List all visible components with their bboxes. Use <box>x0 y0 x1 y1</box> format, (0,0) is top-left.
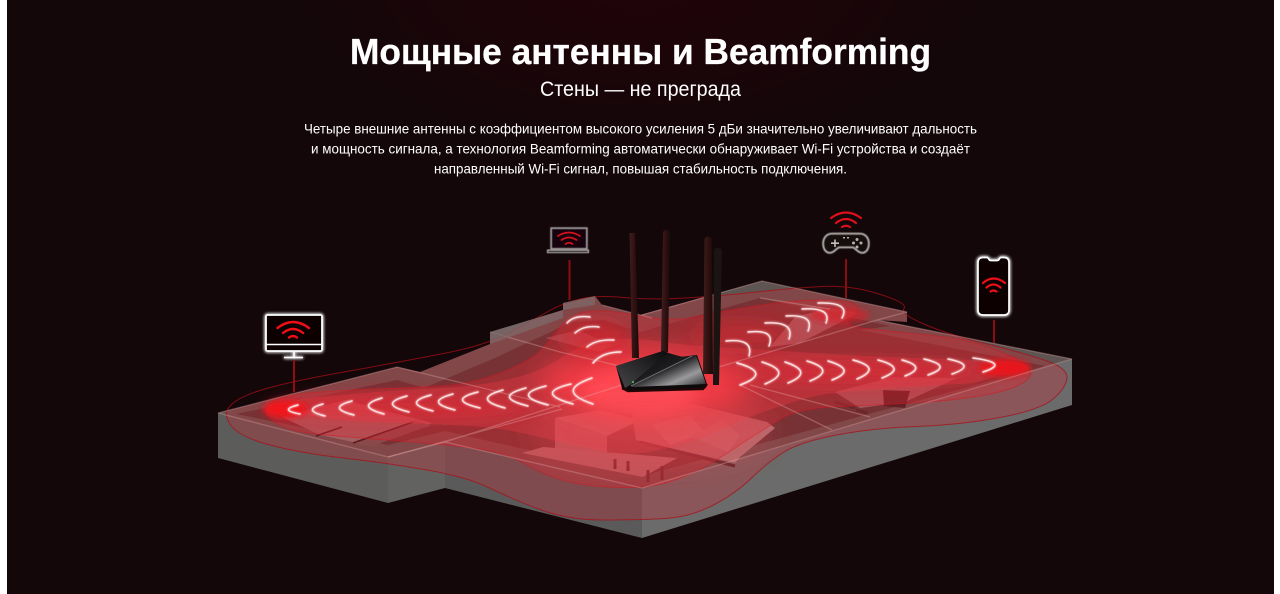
signal waves: right beam <box>737 358 995 385</box>
icon: game controller <box>823 212 869 253</box>
antenna 4 <box>713 248 722 385</box>
antenna 1 <box>630 233 639 358</box>
furniture: bed <box>282 400 432 446</box>
furniture: sofa <box>632 398 775 466</box>
icon: monitor <box>266 315 322 358</box>
signal waves: back-right beam <box>726 303 844 356</box>
connector: controller <box>845 259 847 298</box>
connector: laptop <box>568 260 570 300</box>
furniture: cabinet and table <box>522 410 677 482</box>
icon: smartphone <box>978 258 1009 315</box>
icon: router with four antennas <box>616 230 722 391</box>
description text: и мощность сигнала, а технология Beamforming автоматически обнаруживает Wi-Fi устройства и создаёт <box>311 140 971 156</box>
connector: smartphone <box>993 320 995 343</box>
room interiors <box>218 281 1072 488</box>
signal waves: left beam <box>288 378 593 416</box>
icon: controller wifi <box>831 212 861 227</box>
description text: направленный Wi-Fi сигнал, повышая стабильность подключения. <box>434 160 847 176</box>
signal glow: router core <box>263 307 1031 464</box>
subtitle: Стены — не преграда <box>540 78 741 101</box>
furniture: back-right room and dining area <box>770 308 957 413</box>
signal field: outer contour <box>226 286 1067 520</box>
icon: smartphone wifi <box>983 278 1005 292</box>
signal waves: back-left beam <box>567 317 621 363</box>
connector: monitor <box>293 360 295 392</box>
signal field: middle contour <box>266 300 1030 488</box>
description text <box>304 120 977 176</box>
back edge highlights <box>490 296 595 344</box>
antenna 2 <box>661 230 670 352</box>
title: Мощные антенны и Beamforming <box>350 31 931 72</box>
icon: monitor wifi <box>278 322 309 338</box>
icon: laptop <box>548 228 588 253</box>
icon: laptop wifi <box>558 232 580 244</box>
signal field: inner contour <box>281 339 1005 454</box>
antenna 3 <box>703 236 713 374</box>
furniture: back-left room <box>546 330 612 352</box>
floor plan illustration <box>218 281 1072 538</box>
outer walls <box>218 359 1072 538</box>
description text: Четыре внешние антенны с коэффициентом высокого усиления 5 дБи значительно увеличивают дальность <box>304 120 977 136</box>
interior wall lines <box>218 281 1072 488</box>
router body <box>616 351 707 391</box>
